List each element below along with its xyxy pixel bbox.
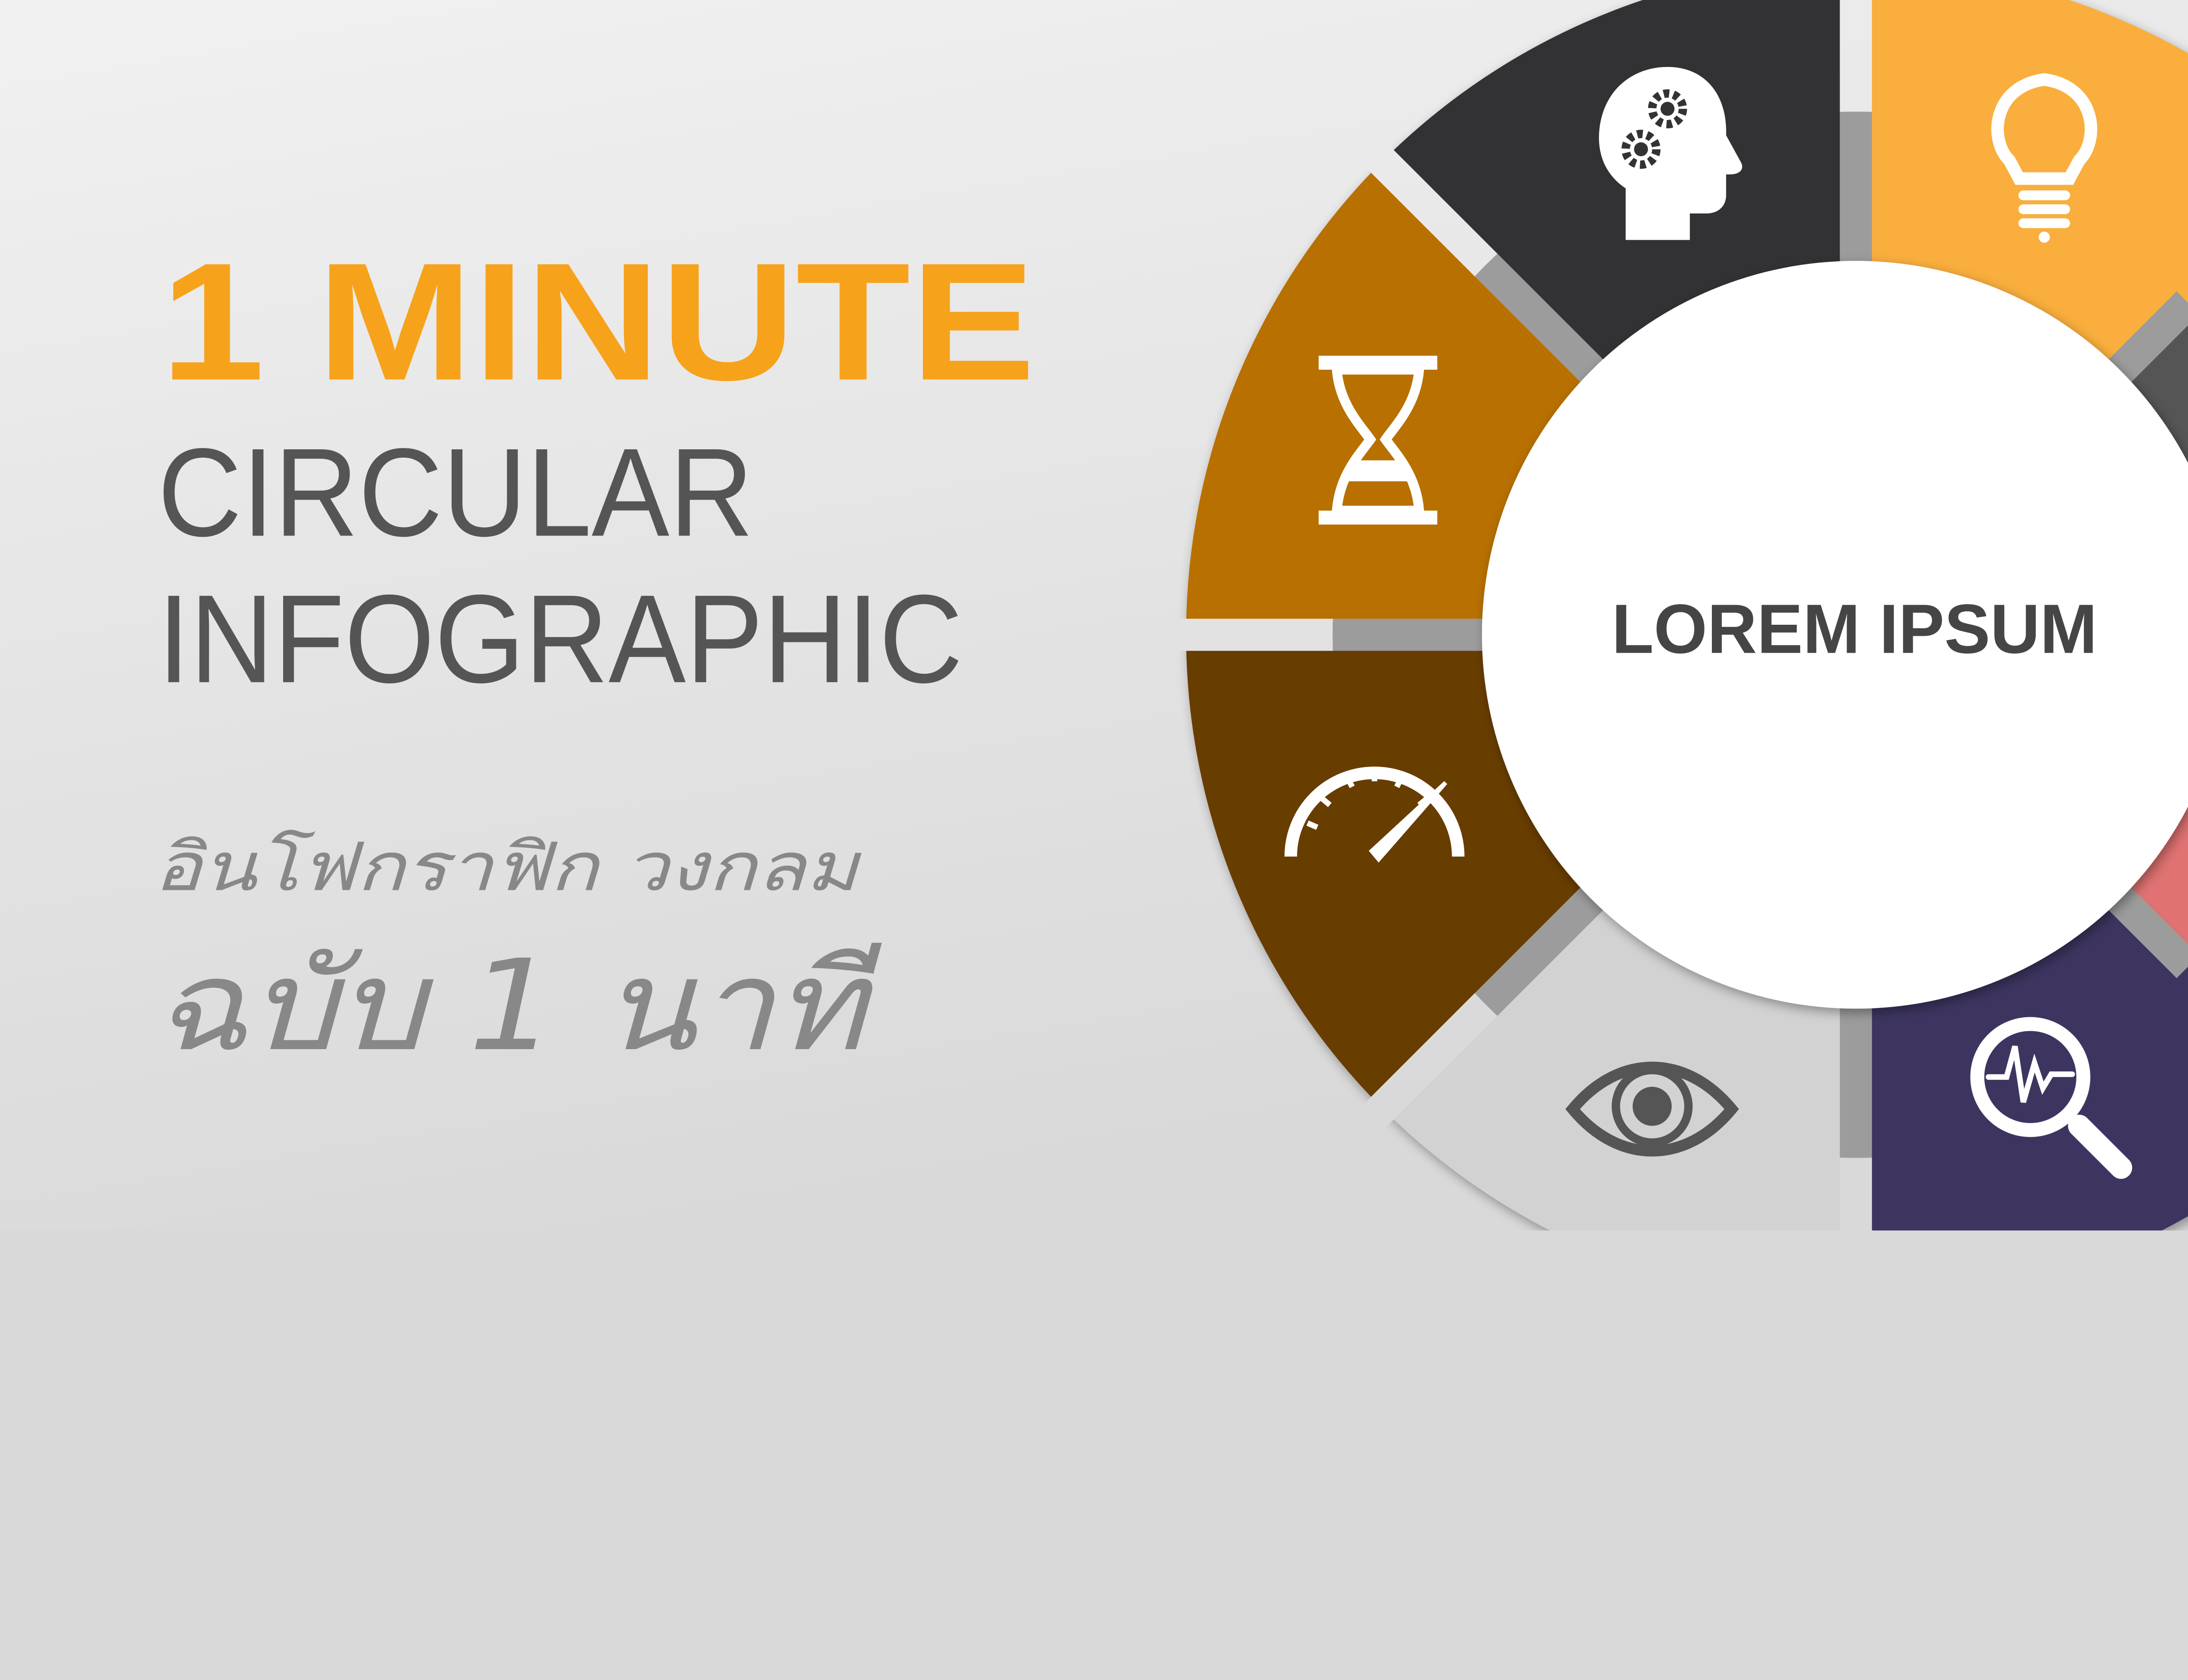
center label: LOREM IPSUM <box>1612 590 2097 668</box>
segment: right lower <box>1856 635 2188 1108</box>
segment: right upper <box>2131 326 2188 463</box>
icon: head with gears <box>1599 67 1742 240</box>
title: 1 MINUTE: 1 MINUTE <box>161 228 1035 415</box>
thai subtitle line 2: ฉบับ 1 นาที <box>154 933 883 1079</box>
infographic canvas <box>0 0 2188 1230</box>
segment: hourglass <box>1182 172 1581 619</box>
thai subtitle line 1: อินโฟกราฟิก วงกลม <box>154 828 862 906</box>
circular segments <box>1186 0 2188 1305</box>
segment: speedometer <box>1186 635 1856 1108</box>
icon: eye <box>1573 1067 1732 1151</box>
segment: bulb <box>1872 0 2188 360</box>
center circle <box>1482 261 2188 1008</box>
title: INFOGRAPHIC: INFOGRAPHIC <box>158 568 963 709</box>
icon: light bulb <box>1998 80 2091 243</box>
segment: head <box>1392 0 1840 360</box>
title: CIRCULAR: CIRCULAR <box>158 422 754 562</box>
icon: speedometer <box>1291 771 1458 859</box>
segment: magnifier <box>1856 635 2188 1305</box>
gray inner ring <box>1332 112 2188 1158</box>
segment: eye <box>1382 635 1856 1305</box>
icon: hourglass <box>1318 356 1437 525</box>
icon: magnifier <box>1977 1024 2121 1168</box>
